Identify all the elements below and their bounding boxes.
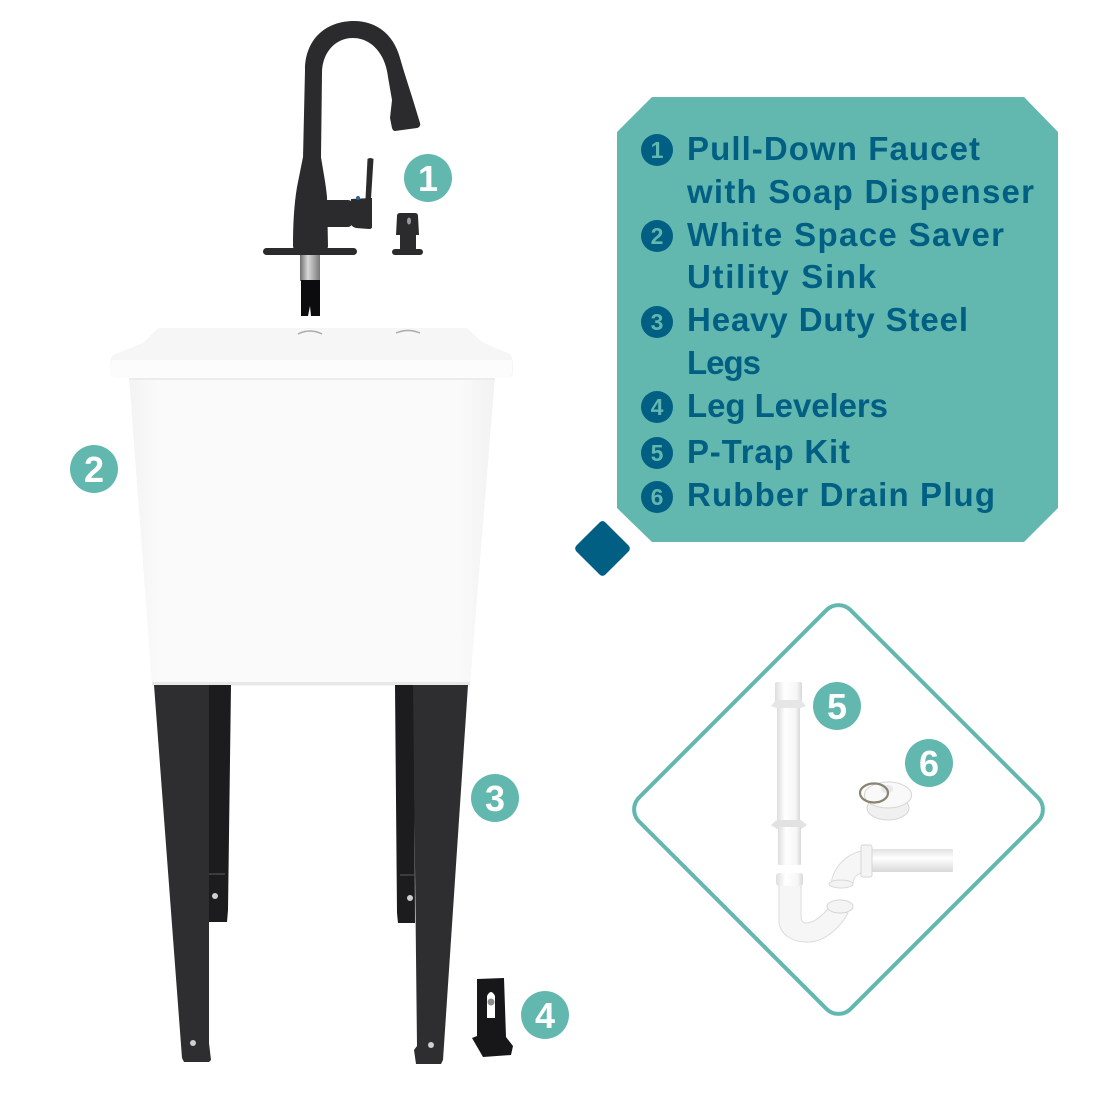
drain shadow under rim — [129, 378, 495, 380]
list item 3: Legs — [687, 344, 761, 381]
tailpiece pipe — [771, 682, 807, 865]
faucet handle — [320, 158, 374, 229]
list item 2 — [641, 216, 1004, 295]
list item 6: 6 — [651, 484, 663, 510]
number badge 6 — [905, 739, 953, 787]
number badge 2: 2 — [84, 449, 104, 490]
number badge 3 — [471, 774, 519, 822]
panel: parts list — [617, 97, 1058, 542]
number badge 1 — [404, 154, 452, 202]
list item 2: 2 — [651, 223, 663, 249]
sink basin — [129, 376, 495, 685]
chrome shank — [300, 255, 320, 281]
number badge 5 — [813, 682, 861, 730]
rim front face — [110, 360, 512, 378]
faucet base — [293, 157, 328, 250]
supply hoses — [301, 280, 320, 316]
basin base shadow — [152, 682, 470, 686]
steel legs — [154, 685, 468, 1064]
list item 4: Leg Levelers — [687, 387, 888, 424]
list item 3: 3 — [651, 309, 663, 335]
left leg — [154, 685, 231, 1062]
list item 1: Pull-Down Faucet — [687, 130, 980, 167]
list item 2: White Space Saver — [687, 216, 1004, 253]
list item 3: Heavy Duty Steel — [687, 301, 968, 338]
leg leveler — [472, 978, 513, 1057]
number badge 6: 6 — [919, 743, 939, 784]
diamond outline frame — [627, 598, 1050, 1021]
list item 4: 4 — [651, 394, 664, 420]
list item 1: with Soap Dispenser — [686, 173, 1034, 210]
number badge 4 — [521, 991, 569, 1039]
deck plate — [263, 248, 357, 255]
panel background — [617, 97, 1058, 542]
list item 1: 1 — [651, 137, 664, 163]
number badge 2 — [70, 445, 118, 493]
trap bend — [776, 873, 853, 942]
p-trap kit — [771, 682, 953, 942]
list item 5: 5 — [651, 440, 664, 466]
number badge 5: 5 — [827, 686, 847, 727]
list item 2: Utility Sink — [687, 258, 877, 295]
faucet spout and neck — [303, 21, 420, 158]
right leg — [395, 685, 468, 1064]
list item 1 — [641, 130, 1034, 210]
faucet — [263, 21, 420, 316]
soap dispenser — [392, 213, 423, 255]
number badge 1: 1 — [418, 158, 438, 199]
rubber drain plug — [860, 782, 912, 820]
wall elbow — [829, 845, 953, 888]
sink rim — [110, 328, 513, 378]
number badge 4: 4 — [535, 995, 555, 1036]
utility sink — [110, 328, 513, 686]
number badge 3: 3 — [485, 778, 505, 819]
accent diamond — [574, 520, 631, 577]
faucet holes — [298, 330, 420, 334]
list item 5: P-Trap Kit — [687, 433, 850, 470]
list item 3 — [641, 301, 968, 381]
list item 6: Rubber Drain Plug — [687, 476, 995, 513]
